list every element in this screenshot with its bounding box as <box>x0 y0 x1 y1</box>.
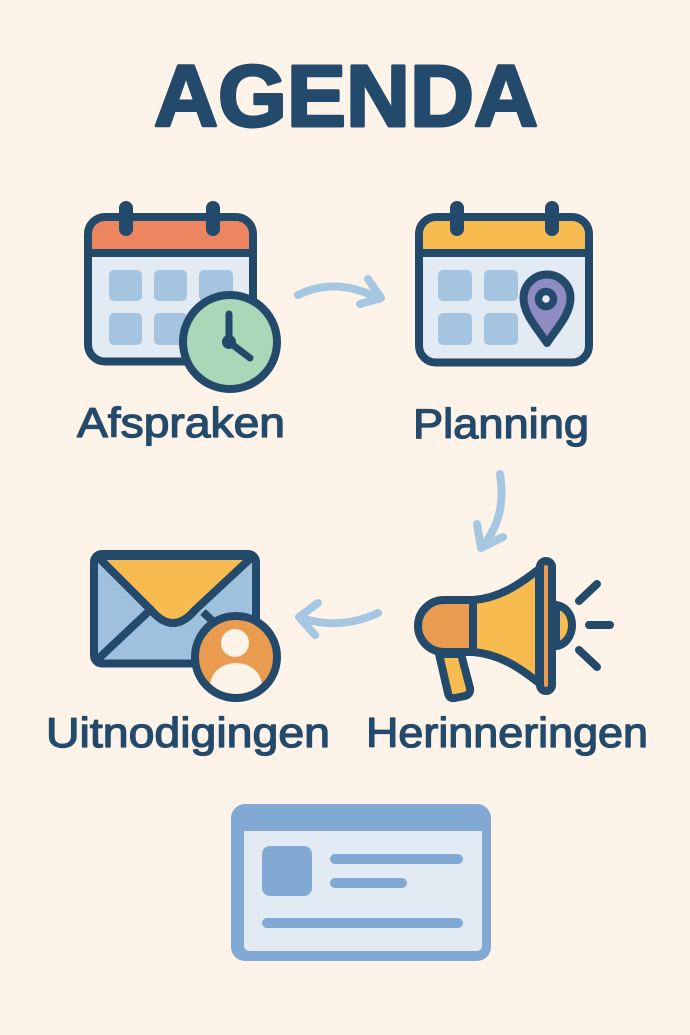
icon: megaphone <box>418 561 610 698</box>
icon: envelope with person <box>94 554 277 698</box>
megaphone rim <box>540 561 552 691</box>
label: Afspraken: Afspraken <box>77 399 285 446</box>
label: Herinneringen: Herinneringen <box>366 709 648 756</box>
icon: information card <box>231 804 491 961</box>
sound lines <box>579 584 610 667</box>
megaphone rear <box>418 600 473 652</box>
label: Uitnodigingen: Uitnodigingen <box>46 709 330 756</box>
title: AGENDA <box>154 48 538 145</box>
arrow: planning to reminders <box>477 474 503 548</box>
label: Planning: Planning <box>413 400 589 447</box>
arrow: calendar to planning <box>298 279 381 304</box>
icon: calendar with clock <box>88 208 277 389</box>
megaphone handle <box>439 654 470 698</box>
megaphone sound dome <box>556 605 572 646</box>
icon: calendar with location pin <box>419 208 589 362</box>
megaphone horn <box>473 569 539 683</box>
arrow: reminders to invitations <box>299 603 378 635</box>
